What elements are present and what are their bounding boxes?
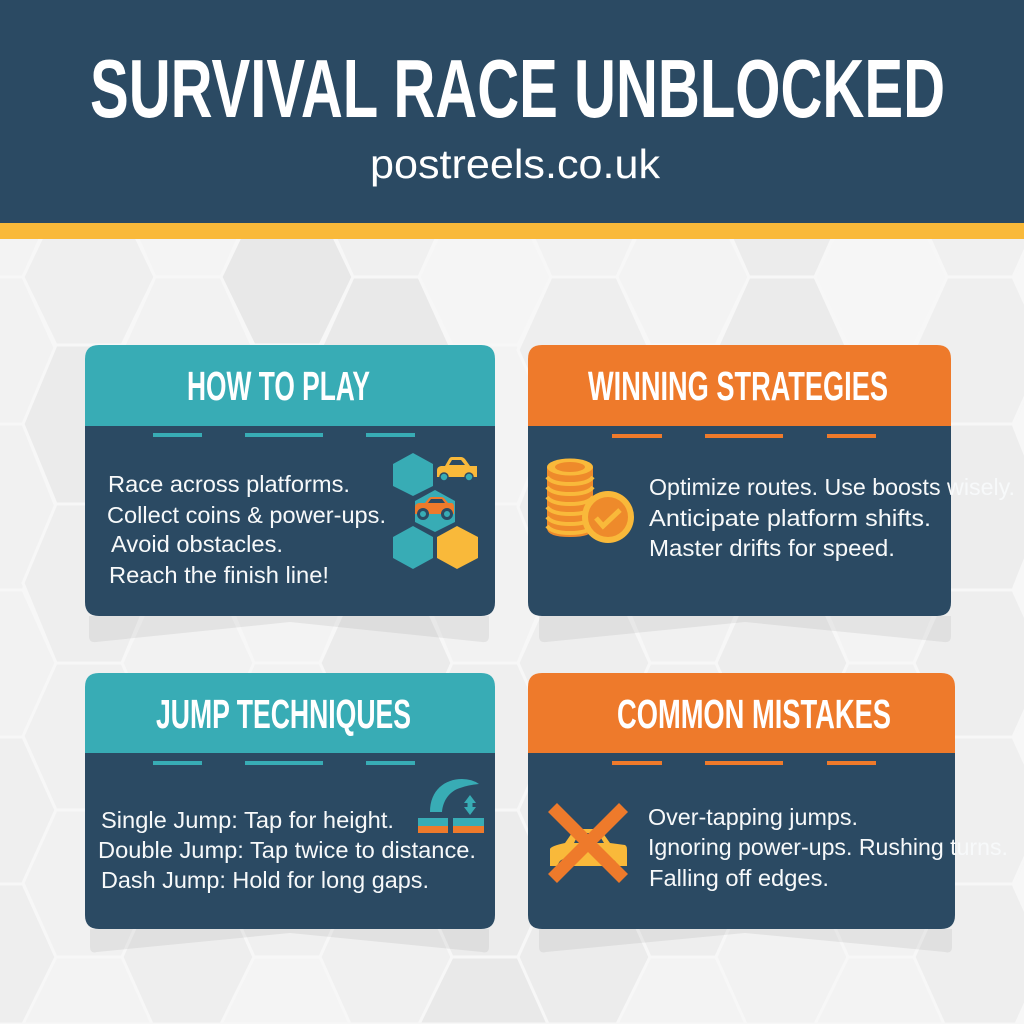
- heading: COMMON MISTAKES: [617, 691, 891, 737]
- icon: hexagons and cars: [393, 453, 478, 569]
- panel: jump techniques: [85, 673, 495, 952]
- header banner: [0, 0, 1024, 239]
- heading: JUMP TECHNIQUES: [156, 691, 411, 737]
- body text: [98, 807, 476, 893]
- body text: Dash Jump: Hold for long gaps.: [101, 867, 429, 893]
- body text: Over-tapping jumps.: [648, 804, 858, 830]
- panel: winning strategies: [528, 345, 1015, 642]
- body text: Reach the finish line!: [109, 562, 329, 588]
- body text: Anticipate platform shifts.: [649, 505, 931, 531]
- heading: HOW TO PLAY: [187, 363, 370, 409]
- panel: common mistakes: [528, 673, 1008, 952]
- panel: how to play: [85, 345, 495, 642]
- body text: Avoid obstacles.: [111, 531, 283, 557]
- icon: jump arc over platforms: [418, 779, 484, 833]
- body text: Single Jump: Tap for height.: [101, 807, 394, 833]
- body text: [649, 474, 1015, 561]
- body text: Collect coins & power-ups.: [107, 502, 386, 528]
- icon: coins with check badge: [547, 458, 634, 543]
- body text: [107, 471, 386, 588]
- body text: Optimize routes. Use boosts wisely.: [649, 474, 1015, 500]
- body text: [648, 804, 1008, 891]
- body text: Ignoring power-ups. Rushing turns.: [648, 834, 1008, 860]
- body text: Falling off edges.: [649, 865, 829, 891]
- subtitle: postreels.co.uk: [370, 141, 661, 187]
- body text: Race across platforms.: [108, 471, 350, 497]
- body text: Master drifts for speed.: [649, 535, 895, 561]
- icon: crossed out car: [550, 808, 627, 878]
- body text: Double Jump: Tap twice to distance.: [98, 837, 476, 863]
